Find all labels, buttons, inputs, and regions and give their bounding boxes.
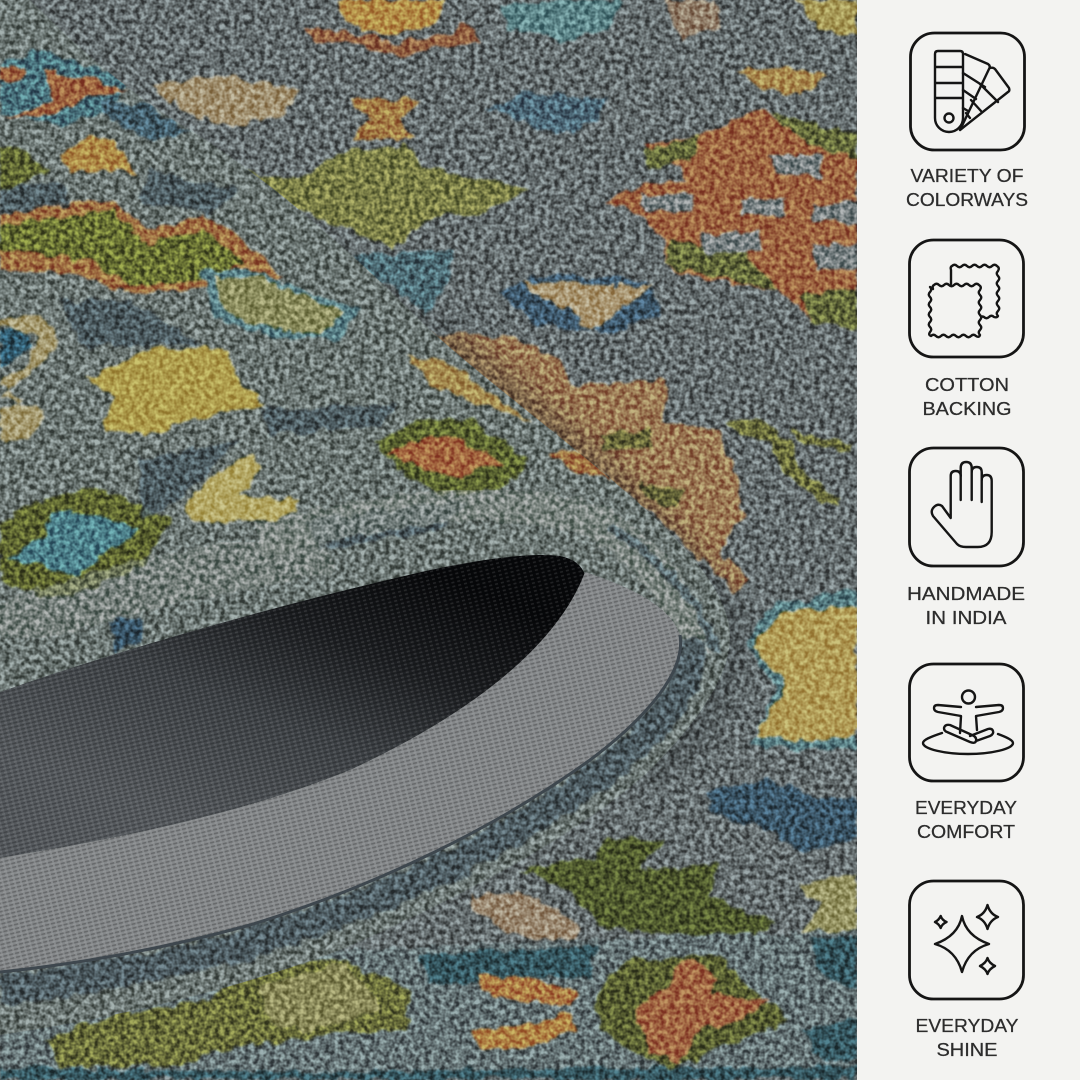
grey backing band [0,572,681,972]
flat rug motifs upper [150,0,857,592]
icon: seated figure [910,664,1024,781]
feature: cotton backing [910,240,1024,419]
label: everyday shine: EVERYDAY [916,1016,1018,1036]
rolled flap top surface [0,0,730,1035]
rug fringe edge [0,635,681,972]
feature: variety of colorways [906,33,1028,210]
icon: sparkles [910,881,1024,999]
label: cotton backing: BACKING [922,399,1012,419]
flap dark speckle patches [0,170,470,550]
feature: handmade in india [907,448,1025,628]
label: variety of colorways: COLORWAYS [906,190,1028,210]
dark underside cavity [0,555,585,858]
label: variety of colorways: VARIETY OF [910,166,1024,186]
rug photograph [0,0,857,1080]
icon: fabric swatches [910,240,1024,357]
label: everyday comfort: EVERYDAY [915,798,1017,818]
label: handmade in india: IN INDIA [926,608,1006,628]
icon: colour fan deck [910,33,1024,150]
label: everyday comfort: COMFORT [917,822,1015,842]
label: handmade in india: HANDMADE [907,584,1025,604]
pile surface of the rug [0,0,857,1080]
flat rug motifs lower [0,590,857,1080]
flap rim stitches [260,505,695,655]
label: cotton backing: COTTON [925,375,1009,395]
flat rug base [0,0,857,1080]
label: everyday shine: SHINE [936,1040,998,1060]
shadow beneath rolled edge [430,330,730,775]
icon: open hand [910,448,1024,566]
flap motifs [0,50,715,655]
knotted pile texture [0,0,857,1080]
lower rolled edge [0,640,692,990]
feature: everyday comfort [910,664,1024,842]
feature: everyday shine [910,881,1024,1060]
white side panel [857,0,1080,1080]
